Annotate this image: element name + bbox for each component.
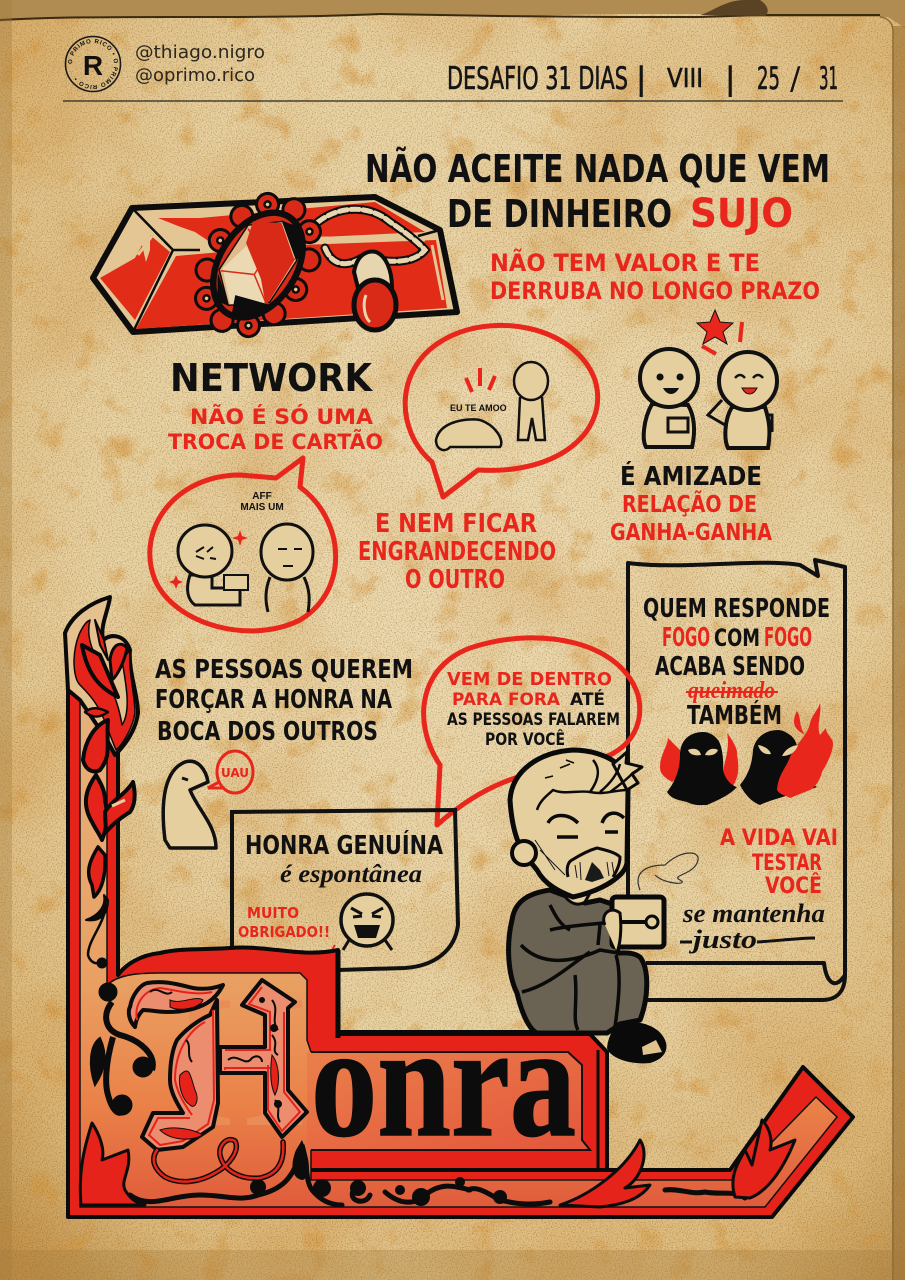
scroll text xyxy=(643,594,830,731)
honra genuína panel: HONRA GENUÍNA xyxy=(245,829,443,861)
header: 31 xyxy=(819,61,838,97)
text: pessoas querem forçar a honra: AS PESSOAS QUEREM xyxy=(155,655,413,685)
challenge counter: / xyxy=(790,61,801,97)
frame body xyxy=(68,683,853,1217)
network heading: TROCA DE CARTÃO xyxy=(168,429,383,454)
challenge counter: | xyxy=(725,61,735,97)
logo: O Primo Rico: R xyxy=(83,50,103,81)
title xyxy=(365,147,830,237)
scroll panel xyxy=(628,560,845,1000)
chain xyxy=(318,209,425,264)
body xyxy=(509,890,647,1033)
speech bubble: de dentro para fora: PARA FORA xyxy=(452,690,561,710)
challenge counter: DESAFIO 31 DIAS xyxy=(447,61,628,97)
initial letter H: H xyxy=(172,957,305,1167)
network heading: NETWORK xyxy=(170,356,373,400)
challenge counter: | xyxy=(636,61,646,97)
speech bubble: de dentro para fora: VEM DE DENTRO xyxy=(447,669,612,690)
cup xyxy=(604,853,698,952)
illustration: dirty gold bar with ruby ring and chain xyxy=(93,170,457,360)
top flame and left vine ornament xyxy=(65,597,138,968)
inner frame fill xyxy=(80,700,837,1207)
speech bubble: de dentro para fora: AS PESSOAS FALAREM xyxy=(447,710,620,730)
network heading xyxy=(168,356,383,454)
subtitle: NÃO TEM VALOR E TE xyxy=(490,248,760,277)
life will test you: VOCÊ xyxy=(765,873,822,899)
life will test you: TESTAR xyxy=(752,851,822,876)
amizade text: GANHA-GANHA xyxy=(610,520,772,546)
H tail flourish xyxy=(154,1140,283,1182)
speech bubble: de dentro para fora: POR VOCÊ xyxy=(485,728,565,750)
ear xyxy=(512,841,536,865)
challenge counter xyxy=(447,61,838,97)
crying face xyxy=(341,894,393,950)
honra genuína panel xyxy=(232,810,458,970)
scroll text: COM xyxy=(714,624,760,652)
character: man with coffee xyxy=(509,750,698,1063)
challenge counter: 25 xyxy=(757,61,780,97)
text: e nem ficar engrandecendo o outro: O OUTRO xyxy=(405,565,505,595)
speech bubble: de dentro para fora xyxy=(424,638,640,825)
face xyxy=(548,813,624,837)
stay fair xyxy=(680,899,825,954)
text: e nem ficar engrandecendo o outro: E NEM FICAR xyxy=(375,509,537,539)
speech bubble: business card xyxy=(150,458,336,631)
friends illustration xyxy=(640,310,777,448)
gold bar xyxy=(93,197,457,332)
honra genuína panel: MUITO xyxy=(247,904,299,922)
speech bubble: eu te amoo xyxy=(405,325,598,497)
title: DE DINHEIRO xyxy=(447,192,672,236)
speech bubble: business card: AFF xyxy=(252,491,272,502)
leaf ornaments xyxy=(80,1120,795,1207)
hair xyxy=(537,752,642,810)
shoes xyxy=(607,1022,666,1063)
life will test you: A VIDA VAI xyxy=(720,826,838,851)
Honra panel tint xyxy=(307,1052,590,1150)
logo: O Primo Rico: O PRIMO RICO • O PRIMO RICO • xyxy=(68,38,118,89)
kneeling character and standing character xyxy=(436,362,548,450)
bottom vine ornament xyxy=(130,1140,745,1206)
amizade text xyxy=(610,460,772,546)
speech bubble: business card: MAIS UM xyxy=(240,502,284,513)
scroll text: TAMBÉM xyxy=(687,699,782,731)
pendant xyxy=(354,252,396,330)
ornamental frame with Honra xyxy=(65,597,853,1217)
text: e nem ficar engrandecendo o outro: ENGRANDECENDO xyxy=(358,537,556,567)
amizade text: É AMIZADE xyxy=(620,460,762,492)
initial letter H xyxy=(129,957,307,1182)
header xyxy=(63,36,843,102)
network heading: NÃO É SÓ UMA xyxy=(190,404,374,429)
scroll text: queimado xyxy=(688,678,775,704)
scroll text: FOGO xyxy=(764,623,812,653)
challenge counter: VIII xyxy=(667,64,703,94)
social handles: @oprimo.rico xyxy=(135,65,255,86)
ring with ruby xyxy=(169,170,347,360)
life will test you xyxy=(720,826,838,899)
head xyxy=(510,750,628,897)
title: SUJO xyxy=(690,191,793,237)
social handles: @thiago.nigro xyxy=(135,42,265,63)
text: pessoas querem forçar a honra xyxy=(155,655,413,747)
stay fair: se mantenha xyxy=(682,899,825,928)
honra genuína panel: OBRIGADO!! xyxy=(238,923,330,941)
amizade text: RELAÇÃO DE xyxy=(622,490,757,518)
text: e nem ficar engrandecendo o outro xyxy=(358,509,556,595)
text: pessoas querem forçar a honra: BOCA DOS OUTROS xyxy=(157,717,378,747)
text: pessoas querem forçar a honra: FORÇAR A HONRA NA xyxy=(155,685,392,715)
burning figures xyxy=(660,703,833,805)
stay fair: justo xyxy=(688,925,757,954)
left black flourish xyxy=(91,983,153,1115)
neck xyxy=(562,890,590,904)
scroll text: FOGO xyxy=(662,623,710,653)
scroll text: QUEM RESPONDE xyxy=(643,594,830,624)
subtitle: DERRUBA NO LONGO PRAZO xyxy=(490,277,820,305)
honra genuína panel: é espontânea xyxy=(280,861,422,888)
social handles xyxy=(135,42,265,86)
scroll text: ACABA SENDO xyxy=(655,652,805,682)
subtitle xyxy=(490,248,820,305)
bird figure saying uau xyxy=(163,751,253,848)
speech bubble: eu te amoo: EU TE AMOO xyxy=(450,403,507,413)
speech bubble: de dentro para fora: ATÉ xyxy=(570,688,605,710)
word onra: onra xyxy=(311,992,576,1170)
bird figure saying uau: UAU xyxy=(221,766,249,780)
